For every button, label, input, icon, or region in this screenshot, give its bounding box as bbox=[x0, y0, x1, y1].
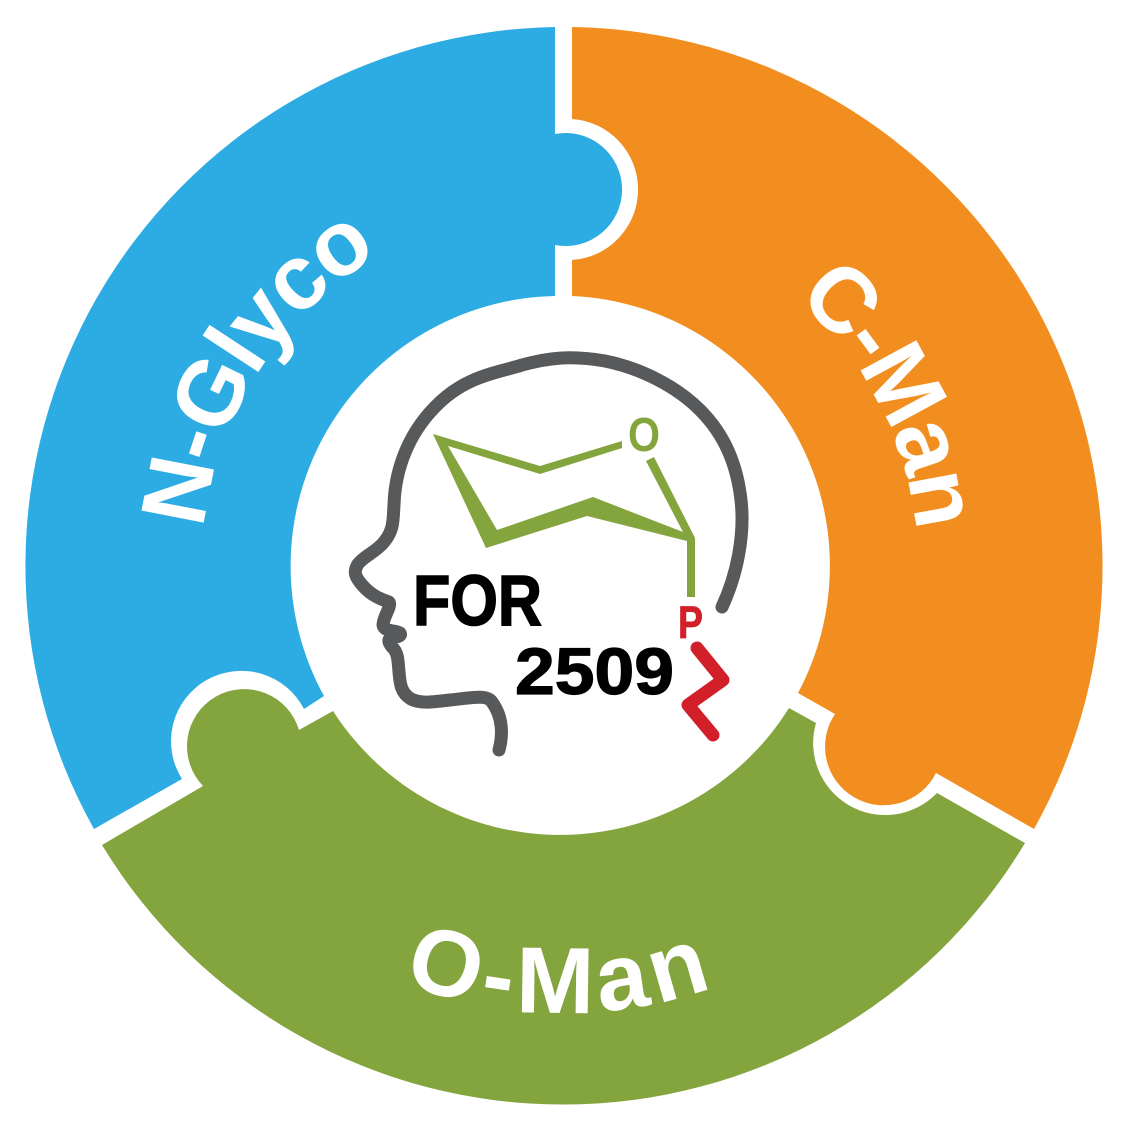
label: N-Glyco: N-Glyco bbox=[142, 224, 368, 523]
title: FOR 2509: FOR bbox=[413, 562, 542, 641]
label: C-Man: C-Man bbox=[810, 266, 963, 526]
ring oxygen label: O bbox=[628, 409, 660, 462]
icon: head profile bbox=[355, 358, 742, 750]
phosphate label: P bbox=[678, 597, 703, 648]
icon: phosphate linker bbox=[678, 597, 723, 735]
icon: pyranose ring bbox=[433, 409, 695, 597]
title: FOR 2509: 2509 bbox=[515, 634, 674, 708]
title: FOR 2509 bbox=[413, 562, 674, 708]
label: O-Man: O-Man bbox=[413, 930, 708, 1014]
